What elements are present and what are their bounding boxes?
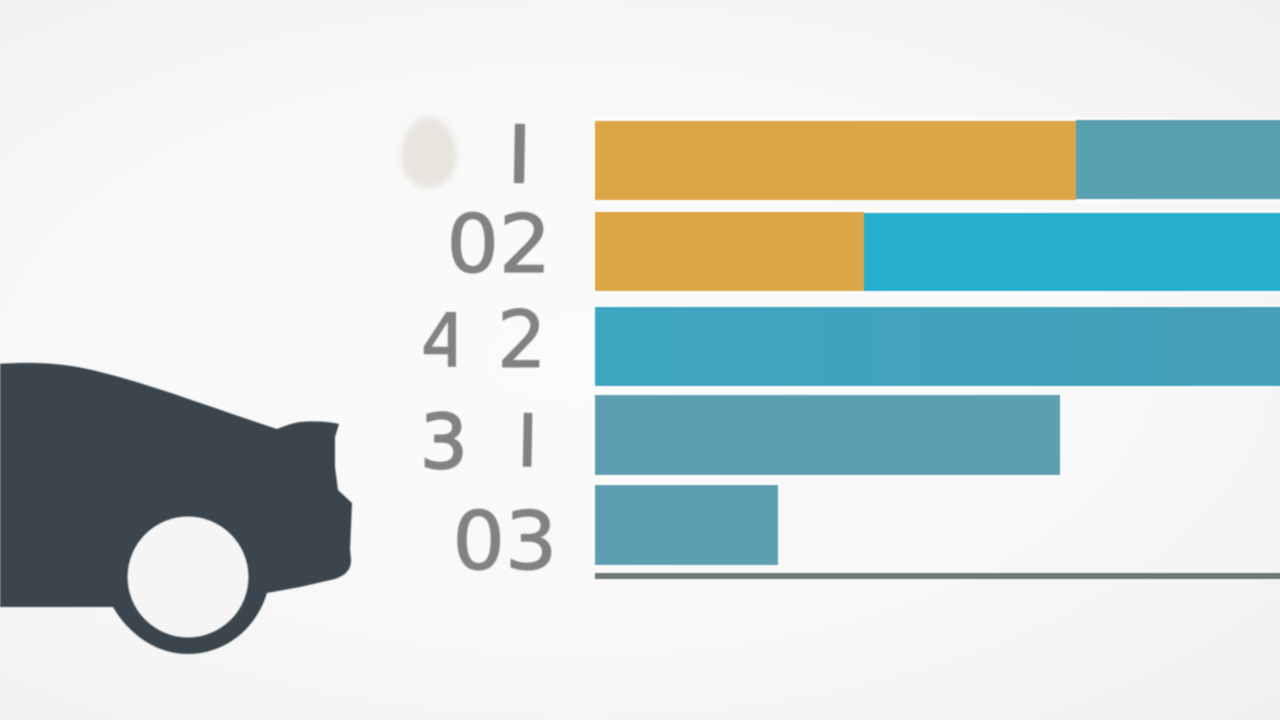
segment: amber: [595, 121, 1076, 200]
row labels: [422, 122, 552, 572]
row label: stick 1 lower: I: [516, 399, 539, 483]
segment: bright blue: [864, 213, 1280, 291]
bar 1: [595, 120, 1280, 200]
row label: 2: 2: [497, 296, 547, 386]
bar chart: [594, 119, 1280, 580]
bar 2: [595, 212, 1280, 291]
row label: fragment 3: 3: [420, 398, 468, 486]
axis baseline: [595, 573, 1280, 579]
row label: fragment 4: 4: [421, 299, 467, 384]
bar 4: [595, 395, 1060, 475]
segment: amber: [595, 212, 864, 291]
bar 3: [595, 307, 1280, 386]
icon: faded smudge: [401, 117, 457, 188]
segment: muted teal: [1076, 120, 1280, 199]
bar 5: [595, 485, 778, 565]
row label: 03: 03: [452, 496, 557, 589]
row label: 02: 02: [446, 199, 551, 292]
row label: stick 1: I: [507, 111, 532, 201]
icon: car silhouette: [0, 362, 353, 655]
